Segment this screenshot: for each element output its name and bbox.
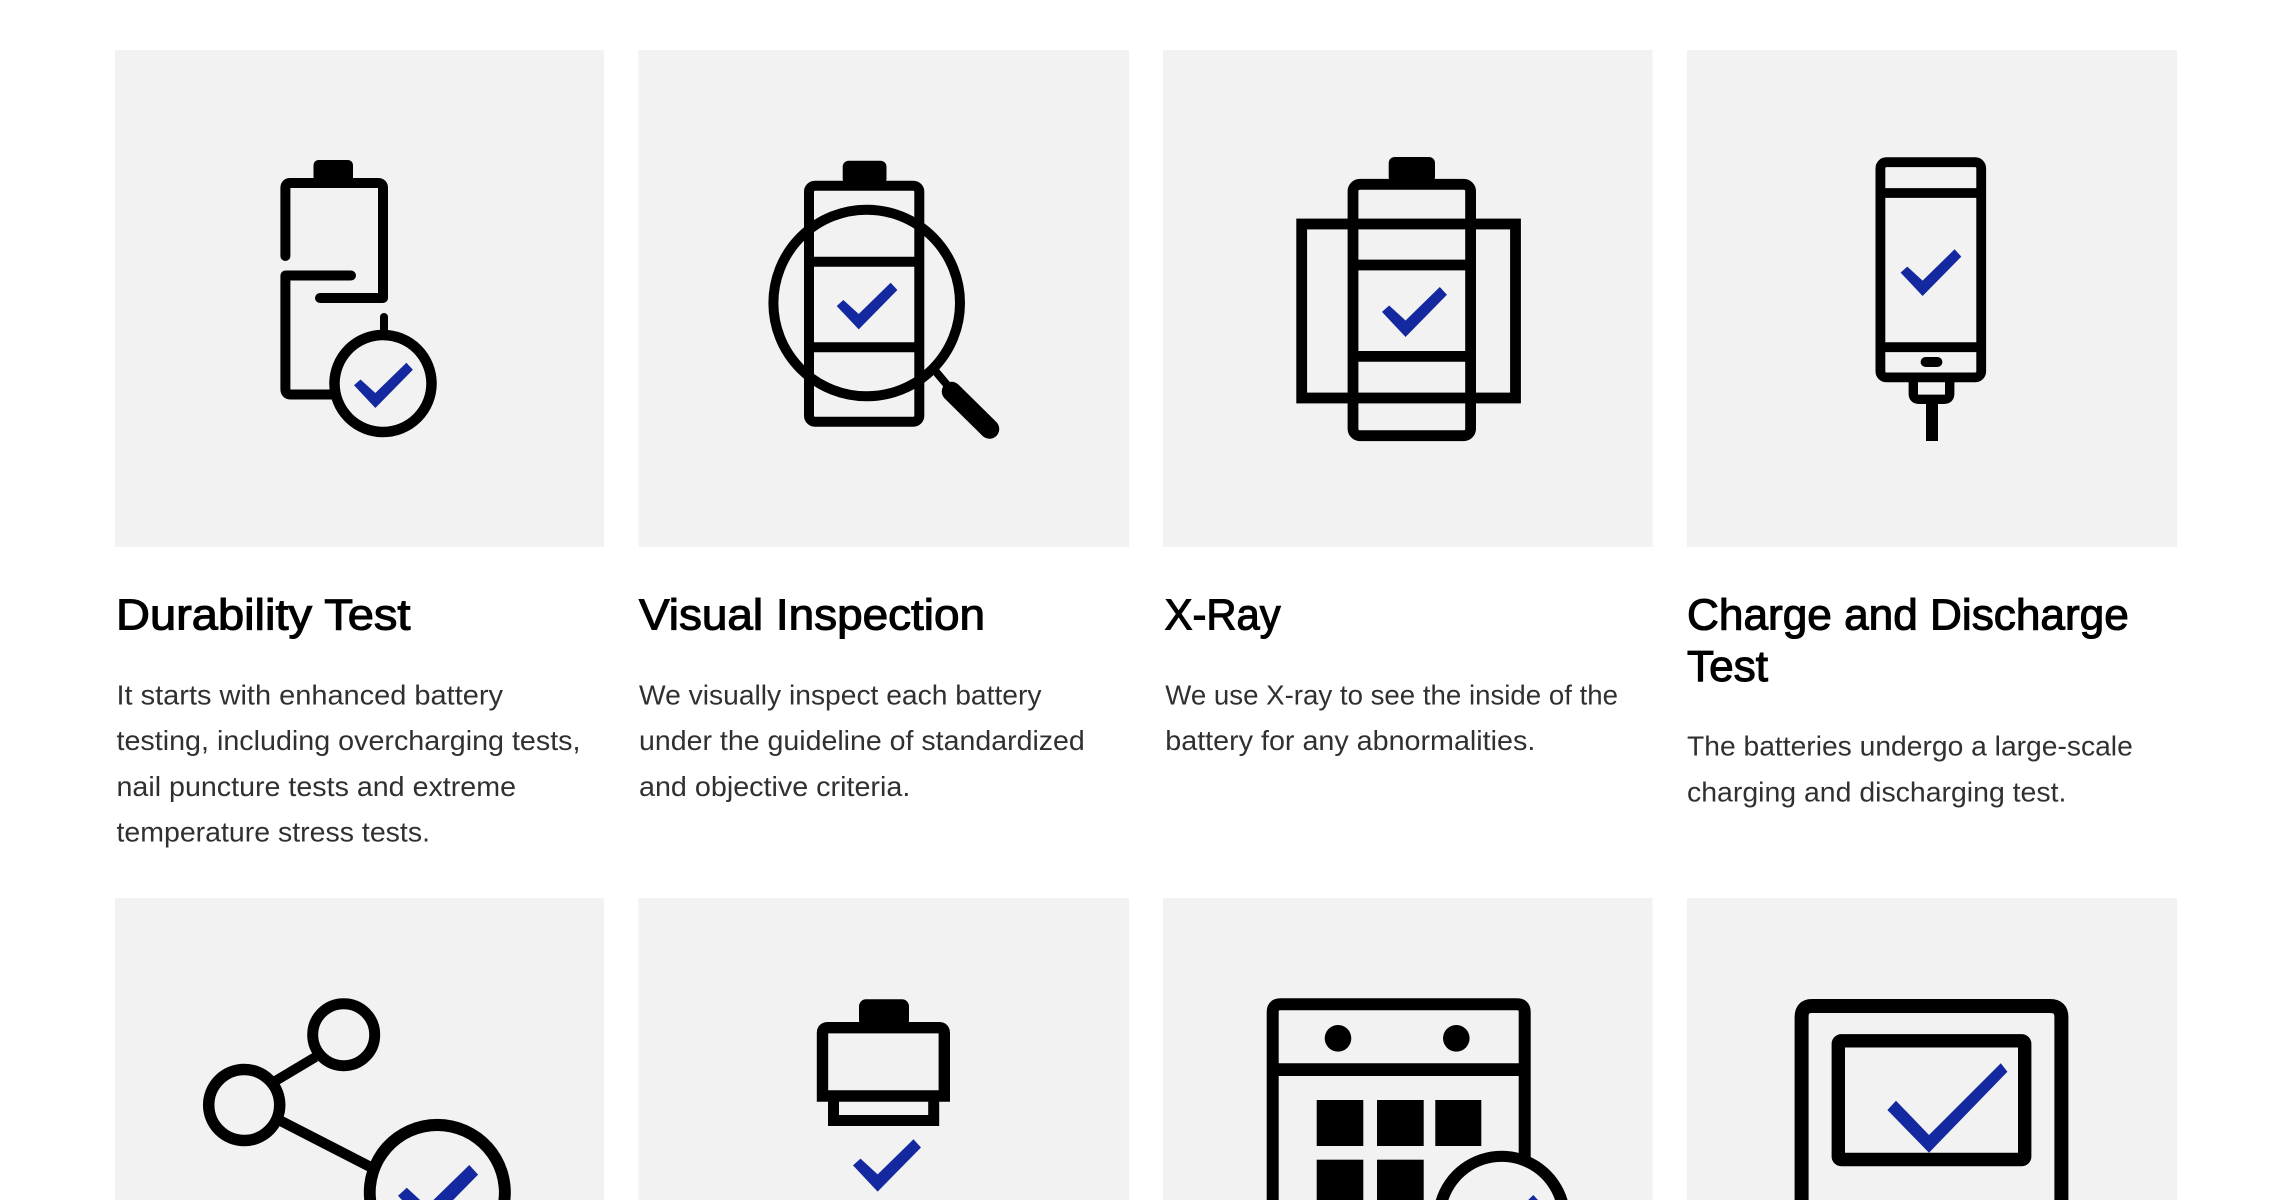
icon panel background: device screen xyxy=(1687,898,2177,1200)
text: durability test description: testing, including overcharging tests, xyxy=(116,725,580,756)
panel: connected nodes test xyxy=(115,898,604,1200)
text: x-ray description: We use X-ray to see the inside of the xyxy=(1165,679,1618,710)
icon panel background: durability test xyxy=(115,50,604,547)
text: visual inspection description: and objective criteria. xyxy=(639,771,910,802)
icon: tablet screen with check xyxy=(1802,1006,2061,1200)
panel: battery pack check xyxy=(638,898,1129,1200)
panel: x-ray xyxy=(1163,50,1653,756)
heading: x-ray: X-Ray xyxy=(1165,591,1281,639)
icon panel background: charge and discharge test xyxy=(1687,50,2177,547)
panel: durability test xyxy=(115,50,604,848)
heading: visual inspection: Visual Inspection xyxy=(639,591,985,639)
icon: battery with check circle xyxy=(285,160,432,432)
icon: connected nodes with check circle xyxy=(209,1004,511,1200)
text: x-ray description: battery for any abnormalities. xyxy=(1165,725,1535,756)
text: visual inspection description xyxy=(639,679,1085,802)
text: charge and discharge description: charging and discharging test. xyxy=(1687,777,2066,808)
text: x-ray description xyxy=(1165,679,1618,756)
icon: calendar with check circle xyxy=(1272,1004,1568,1200)
icon panel background: calendar xyxy=(1163,898,1653,1200)
text: visual inspection description: under the guideline of standardized xyxy=(639,725,1085,756)
text: visual inspection description: We visually inspect each battery xyxy=(639,679,1042,710)
panel: charge and discharge test xyxy=(1687,50,2177,808)
icon panel background: battery pack check xyxy=(638,898,1129,1200)
text: durability test description: It starts with enhanced battery xyxy=(116,679,503,710)
icon panel background: connected nodes xyxy=(115,898,604,1200)
heading: durability test: Durability Test xyxy=(116,591,410,639)
icon: short battery with check xyxy=(817,999,950,1192)
heading: charge and discharge test: Test xyxy=(1687,643,1768,691)
text: charge and discharge description: The batteries undergo a large-scale xyxy=(1687,731,2133,762)
heading: charge and discharge test xyxy=(1687,591,2129,691)
icon: phone on charging cable xyxy=(1880,162,1981,441)
text: durability test description xyxy=(116,679,580,848)
icon panel background: visual inspection xyxy=(638,50,1129,547)
icon: battery with x-ray frame xyxy=(1302,157,1516,436)
panel: device screen test xyxy=(1687,898,2177,1200)
icon panel background: x-ray xyxy=(1163,50,1653,547)
icon: battery under magnifying glass xyxy=(773,161,990,429)
text: durability test description: temperature stress tests. xyxy=(116,817,430,848)
heading: charge and discharge test: Charge and Discharge xyxy=(1687,591,2129,639)
panel: calendar test xyxy=(1163,898,1653,1200)
text: charge and discharge description xyxy=(1687,731,2133,808)
text: durability test description: nail puncture tests and extreme xyxy=(116,771,516,802)
panel: visual inspection xyxy=(638,50,1129,802)
